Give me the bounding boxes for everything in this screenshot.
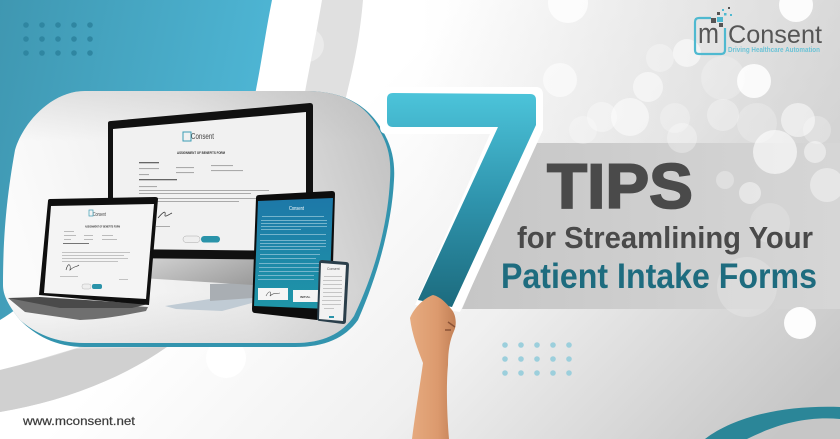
bokeh circles behind panel [206,0,293,378]
subtitle line 1: for Streamlining Your [517,220,813,255]
hand holding the 7 [410,295,456,439]
monitor form text: ASSIGNMENT OF BENEFITS FORM [177,151,225,155]
monitor logo [183,132,191,141]
title: TIPS: TIPS [547,152,693,222]
dot grid: lower middle [502,342,572,376]
tablet [252,191,335,320]
laptop: Consent [93,212,106,218]
website url: www.mconsent.net [22,416,136,428]
monitor buttons [183,236,200,242]
gray arc band [0,0,363,412]
numeral 7 [380,87,543,312]
logo: mConsent: Consent [728,21,822,49]
gray title band [462,143,840,309]
tablet: INITIAL [300,295,311,299]
bokeh circles [290,0,840,339]
monitor: Consent [191,132,215,141]
monitor [108,103,313,311]
phone [317,260,349,324]
panel: device mockups [3,91,394,347]
logo wordmark: m [698,18,719,50]
bottom-right teal arc [705,407,840,439]
laptop [8,197,158,320]
teal corner shape [0,0,272,320]
logo: mConsent [695,7,822,54]
panel outline [3,91,394,347]
logo tagline: Driving Healthcare Automation [728,47,820,54]
dot grid: top left [23,22,93,56]
laptop: ASSIGNMENT OF BENEFITS FORM [85,226,120,228]
logo pixels [711,7,732,27]
logo tablet frame [695,18,725,54]
tablet: Consent [289,206,304,212]
phone: Consent [327,267,340,271]
subtitle line 2: Patient Intake Forms [501,257,817,296]
